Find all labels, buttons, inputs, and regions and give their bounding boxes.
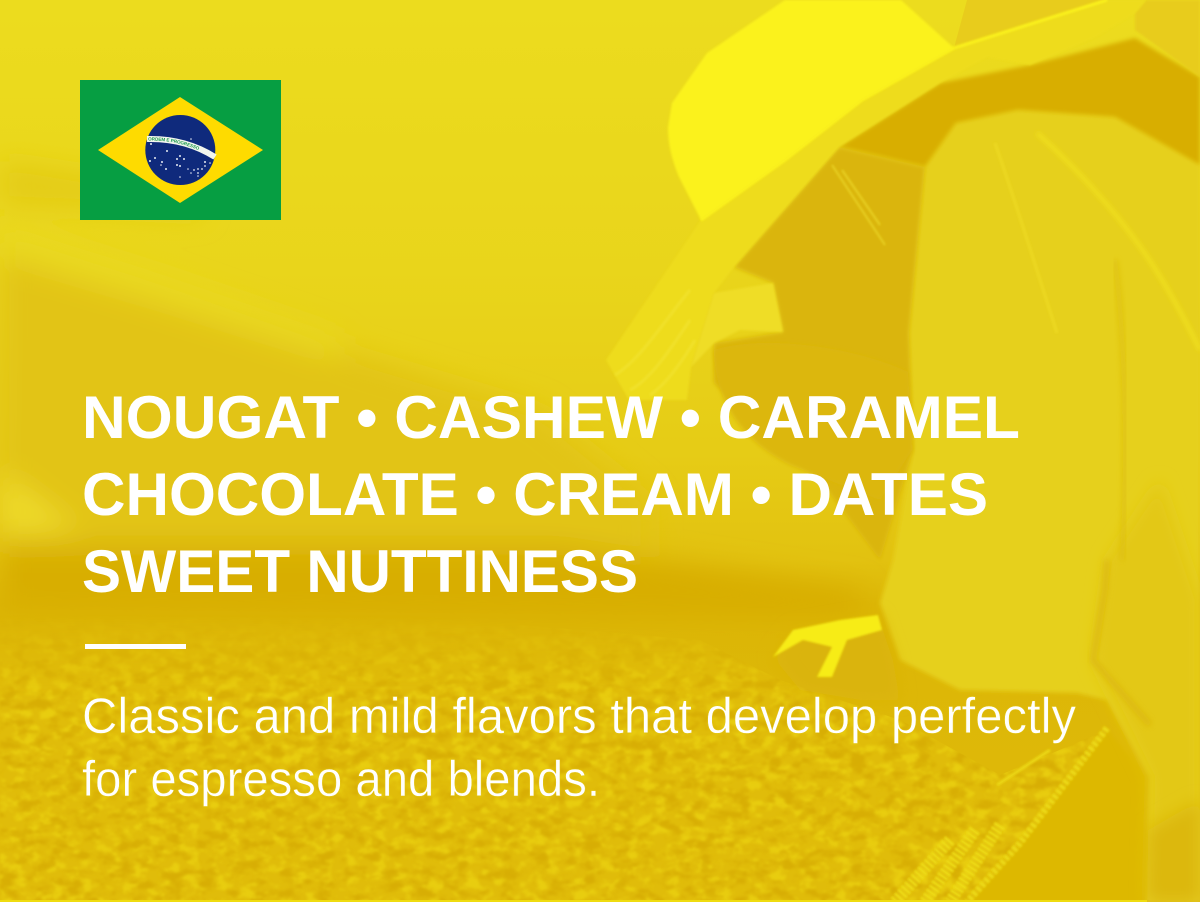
bottom edge line <box>0 900 1147 902</box>
divider rule <box>85 644 186 649</box>
description text <box>82 688 1076 807</box>
blurred hillside <box>0 160 860 620</box>
heading: flavor notes <box>82 384 1020 605</box>
hand highlight <box>773 615 882 677</box>
hat under flap <box>691 283 783 367</box>
background top right behind hat <box>954 0 1107 48</box>
farmer lap shadow <box>967 730 1150 902</box>
hat brim <box>606 0 1146 400</box>
flag motto: ORDEM E PROGRESSO <box>148 137 200 150</box>
hair and hat shadow <box>839 38 1200 167</box>
farmer sleeve and torso <box>880 110 1200 902</box>
hat crown <box>668 0 954 220</box>
face and arm in shadow <box>714 147 925 560</box>
flag stars <box>149 138 211 178</box>
description text: Classic and mild flavors that develop perfectly <box>82 688 1076 744</box>
heading: flavor notes: NOUGAT • CASHEW • CARAMEL <box>82 384 1020 451</box>
heading: flavor notes: SWEET NUTTINESS <box>82 538 638 605</box>
coffee bean ground <box>0 647 1086 900</box>
heading: flavor notes: CHOCOLATE • CREAM • DATES <box>82 461 988 528</box>
woven basket strap <box>895 728 1107 902</box>
flag of Brazil <box>80 80 281 220</box>
description text: for espresso and blends. <box>82 751 600 807</box>
shadow under hand <box>773 615 900 700</box>
